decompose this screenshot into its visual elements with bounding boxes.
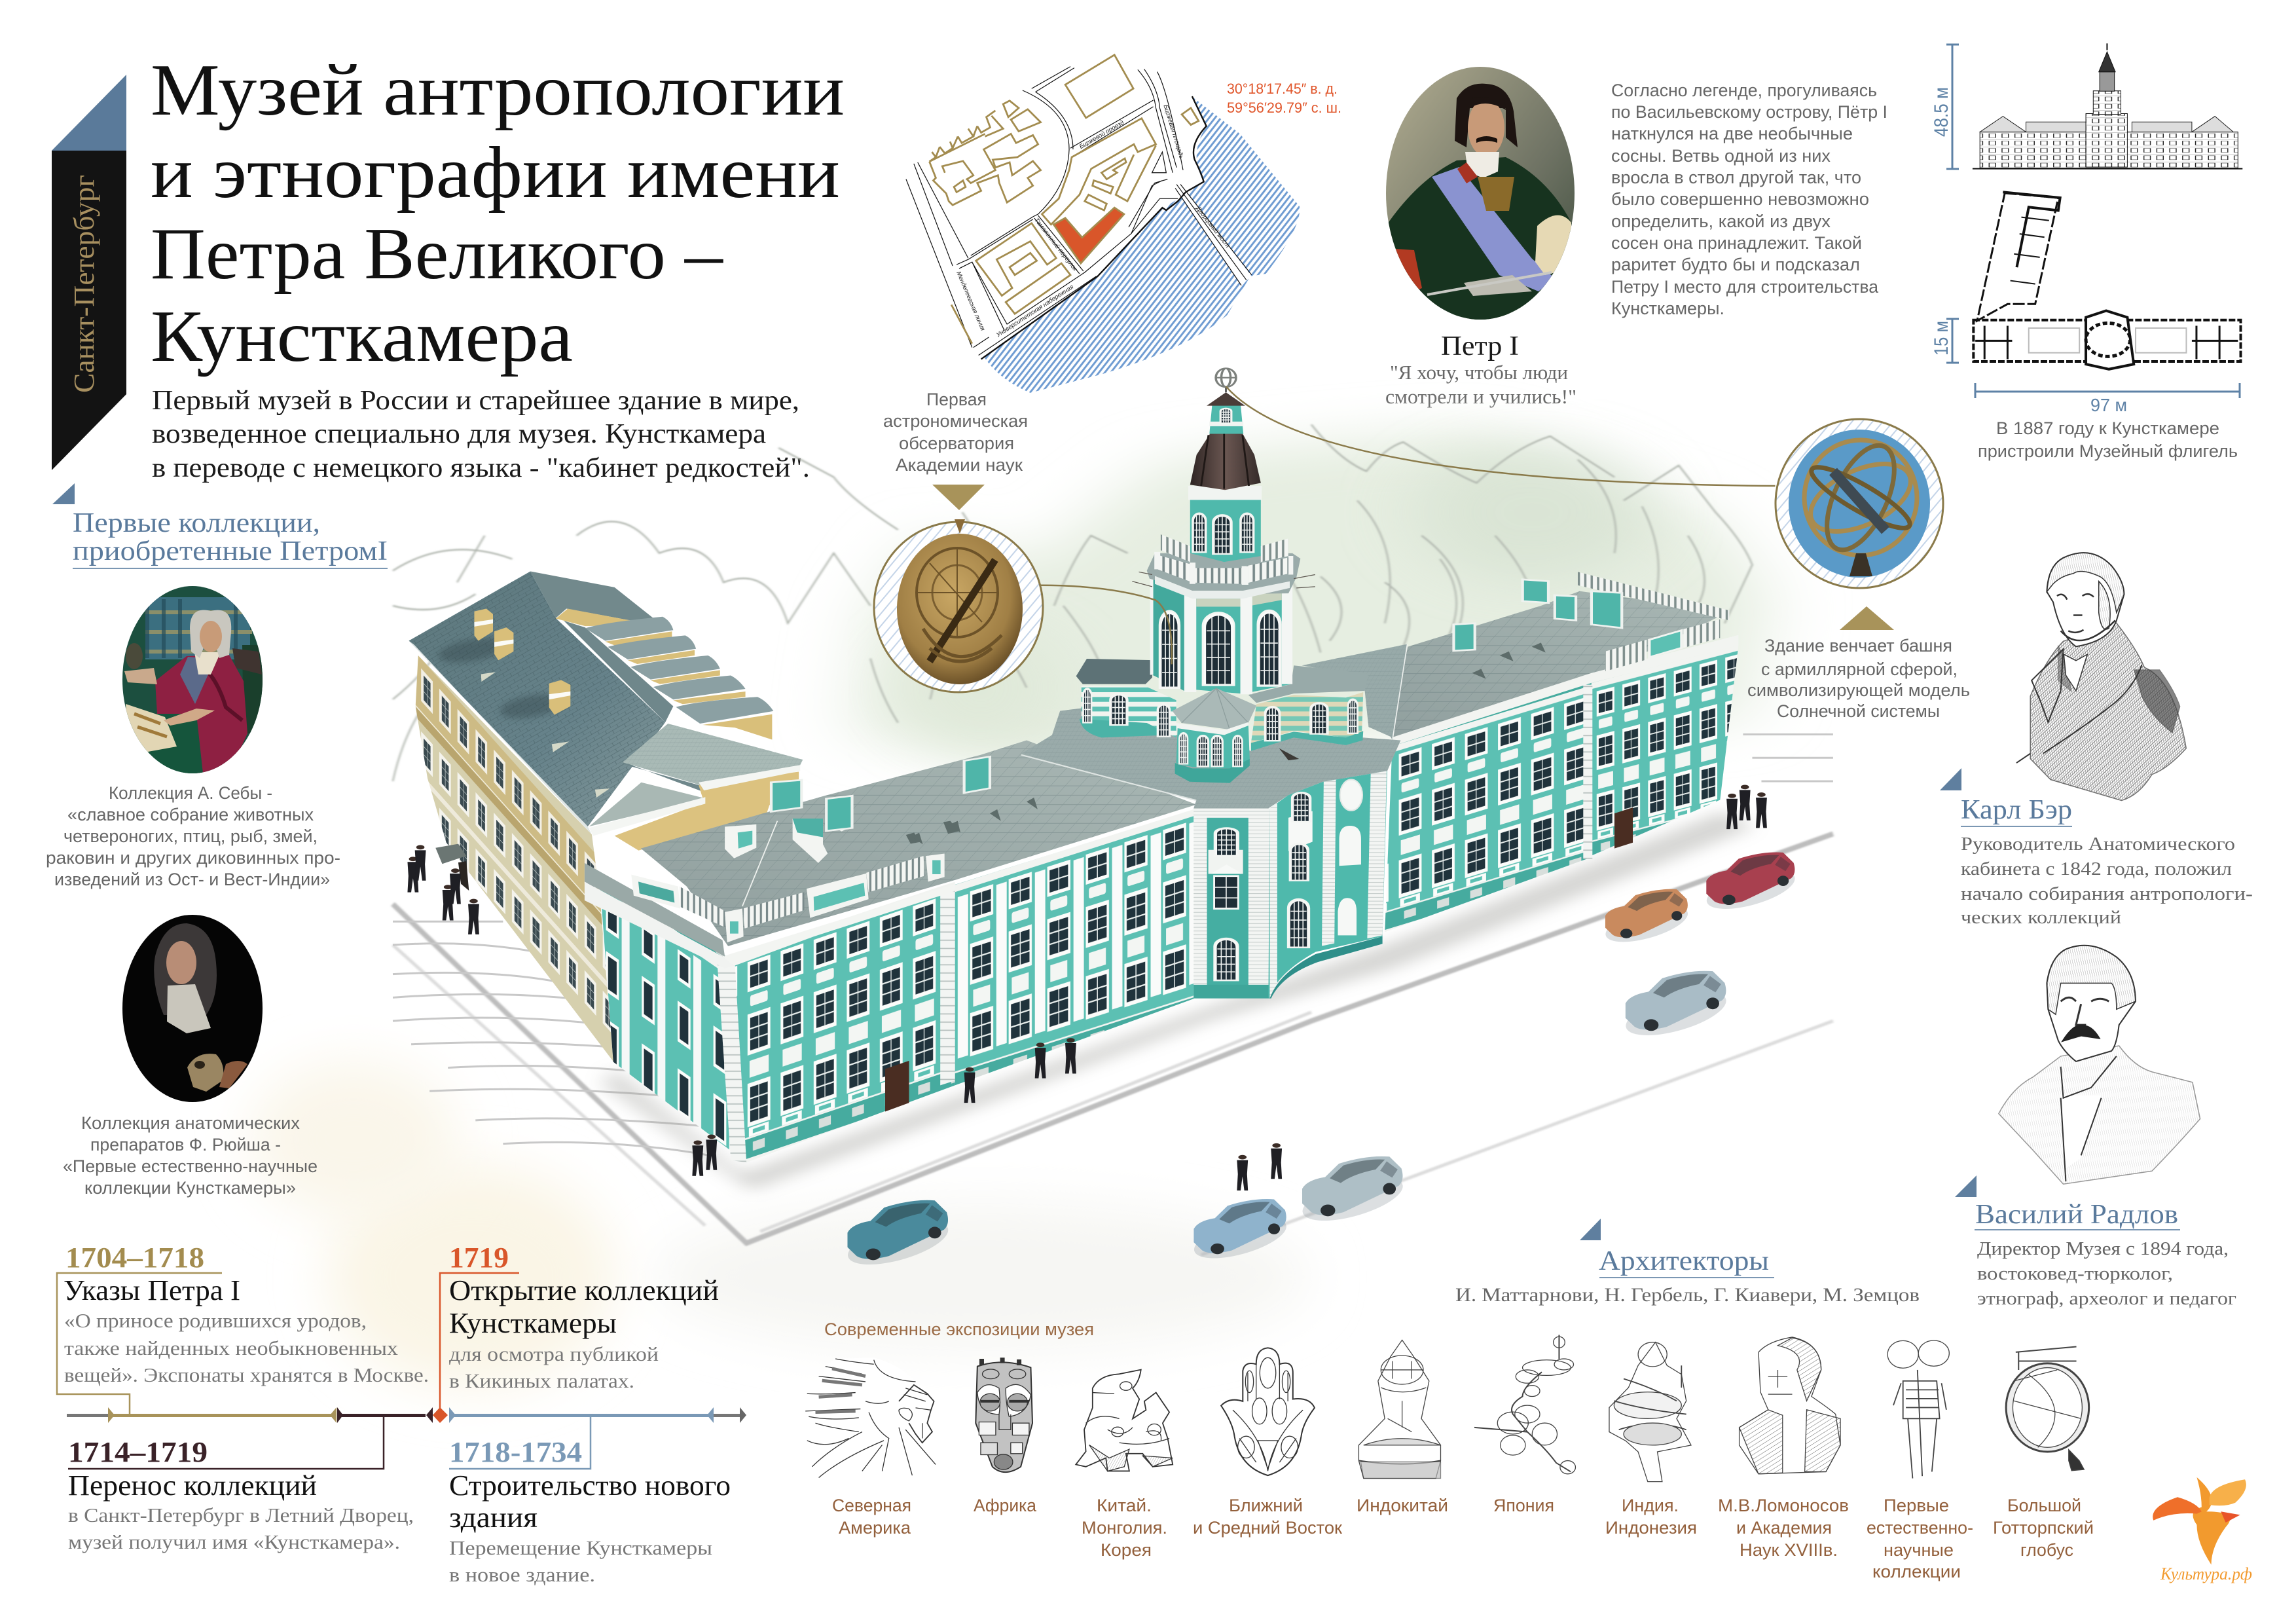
map: Биржевой проезд (1078, 119, 1125, 151)
timeline: 1719: для осмотра публикой (449, 1342, 659, 1365)
exposition labels: Корея (1101, 1540, 1152, 1560)
caption: observatory (883, 390, 1028, 475)
main facade right section (955, 809, 1194, 1085)
timeline: 1714–1719: Перенос коллекций (68, 1469, 317, 1502)
chimneys on front roof rear (771, 756, 990, 831)
heading: architects: И. Маттарнови, Н. Гербель, Г. Киавери, М. Земцов (1455, 1284, 1920, 1306)
legend text: Кунсткамеры. (1611, 299, 1724, 318)
caption: observatory: Первая (926, 390, 987, 409)
pointer down (932, 485, 985, 510)
caption: observatory: Академии наук (896, 455, 1023, 475)
timeline: 1718-1734: 1718-1734 (449, 1436, 582, 1468)
street sketch (393, 735, 1833, 1255)
timeline: 1718-1734: здания (449, 1502, 538, 1534)
left wing (409, 571, 803, 1061)
text: Radlov: Директор Музея с 1894 года, (1977, 1239, 2229, 1259)
cars (837, 853, 1804, 1274)
upper tower (1161, 369, 1288, 562)
front roof details (585, 819, 958, 968)
portrait: Peter I (1386, 65, 1575, 321)
timeline: 1704–1718 (57, 1242, 429, 1415)
timeline: 1719: в Кикиных палатах. (449, 1369, 634, 1392)
dimensions: 48.5 м (1931, 87, 1952, 137)
exposition labels (832, 1496, 2094, 1581)
caption: tower (1747, 636, 1970, 721)
caption: Ruysch collection: препаратов Ф. Рюйша - (90, 1135, 281, 1154)
elevation drawing (1973, 43, 2242, 169)
background washes (249, 1061, 1309, 1388)
icon: Buddha (1358, 1340, 1440, 1479)
exposition labels: и Средний Восток (1193, 1518, 1342, 1538)
caption: Seba collection: четвероногих, птиц, рыб, змей, (64, 826, 318, 846)
timeline: 1719 (440, 1242, 719, 1415)
Peter I name and quote: смотрели и учились!" (1385, 385, 1576, 408)
ribbon: Санкт-Петербург: Санкт-Петербург (68, 175, 100, 393)
caption: Ruysch collection (63, 1113, 318, 1198)
tower balustrade (1154, 552, 1293, 585)
timeline: 1719: Открытие коллекций (449, 1274, 719, 1306)
logo: Культура.рф (2153, 1477, 2252, 1583)
icon: skeleton (1887, 1340, 1949, 1479)
logo: Культура.рф: Культура.рф (2160, 1564, 2252, 1583)
timeline: 1704–1718: «О приносе родившихся уродов, (64, 1309, 367, 1332)
floor plan (1973, 192, 2241, 369)
exposition labels: естественно- (1867, 1518, 1973, 1538)
heading: Radlov: Василий Радлов (1975, 1200, 2178, 1230)
portrait sketch: Baer (2016, 553, 2186, 800)
portrait: Ruysch (122, 915, 263, 1102)
central block (1021, 553, 1408, 999)
timeline: 1704–1718: вещей». Экспонаты хранятся в Москве. (64, 1363, 429, 1386)
timeline: 1718-1734: Строительство нового (449, 1469, 731, 1502)
icon: Lomonosov (1740, 1337, 1840, 1474)
sketch background (393, 424, 1770, 781)
chimneys (474, 609, 610, 798)
heading: architects: Архитекторы (1599, 1246, 1769, 1276)
front roof (641, 740, 1197, 946)
timeline: 1704–1718: Указы Петра I (64, 1274, 240, 1306)
central apron roof (1021, 709, 1400, 809)
left pavilion (1076, 659, 1152, 684)
exposition labels: коллекции (1872, 1562, 1961, 1581)
legend text: вросла в ствол другой так, что (1611, 168, 1861, 187)
timeline: 1714–1719 (68, 1415, 414, 1553)
caption: Seba collection (46, 783, 340, 889)
exposition labels: и Академия (1736, 1518, 1832, 1538)
exposition labels: М.В.Ломоносов (1718, 1496, 1849, 1515)
subtitle: возведенное специально для музея. Кунсткамера (152, 419, 766, 449)
Peter I name and quote (1385, 331, 1576, 408)
map (906, 55, 1300, 393)
exposition labels: глобус (2020, 1540, 2073, 1560)
title (151, 50, 845, 377)
yellow wall (615, 771, 799, 851)
exposition labels: Индокитай (1357, 1496, 1448, 1515)
caption: Seba collection: изведений из Ост- и Вест-Индии» (54, 870, 330, 889)
caption: Ruysch collection: Коллекция анатомических (81, 1113, 300, 1133)
subtitle: Первый музей в России и старейшее здание в мире, (152, 386, 799, 416)
exposition labels: Готторпский (1993, 1518, 2094, 1538)
heading: first collections: приобретенные ПетромI (73, 536, 388, 566)
exposition labels: Африка (974, 1496, 1037, 1515)
subtitle (152, 386, 810, 483)
exposition icons: first row part (805, 1348, 1315, 1477)
portrait sketch: Radlov (1999, 946, 2200, 1184)
central pavilion (1173, 688, 1256, 729)
right facade (1385, 646, 1738, 932)
pointer up (1840, 606, 1894, 630)
title: Музей антропологии (151, 50, 845, 131)
exposition labels: Ближний (1229, 1496, 1303, 1515)
timeline: 1719: Кунсткамеры (449, 1307, 617, 1339)
heading: first collections: Первые коллекции, (73, 508, 320, 538)
legend text: по Васильевскому острову, Пётр I (1611, 102, 1887, 122)
timeline: 1714–1719: в Санкт-Петербург в Летний Дворец, (68, 1504, 414, 1526)
caption: tower: Солнечной системы (1777, 701, 1940, 721)
armillary sphere callout (1776, 419, 1943, 588)
icon: globe (2006, 1346, 2089, 1471)
legend text: раритет будто бы и подсказал (1611, 255, 1860, 274)
dimensions: 15 м (1931, 321, 1952, 356)
heading: expositions: Современные экспозиции музея (824, 1320, 1094, 1339)
text: Karl Baer: Руководитель Анатомического (1961, 834, 2235, 855)
map coordinates: 59°56′29.79″ с. ш. (1227, 100, 1341, 116)
caption: Ruysch collection: «Первые естественно-научные (63, 1156, 318, 1176)
map coordinates: 30°18′17.45″ в. д. (1227, 81, 1338, 97)
title: Петра Великого – (151, 213, 723, 295)
astrolabe callout (874, 519, 1043, 692)
caption: tower: символизирующей модель (1747, 680, 1970, 700)
legend text (1611, 81, 1887, 318)
heading: Karl Baer: Карл Бэр (1961, 795, 2072, 825)
timeline: 1714–1719: 1714–1719 (68, 1436, 208, 1468)
heading: Radlov (1955, 1175, 2180, 1230)
icon: Hamsa (1221, 1348, 1315, 1475)
right pavilion (1248, 665, 1368, 703)
legend text: Петру I место для строительства (1611, 277, 1879, 297)
map: Университетская набережная (994, 284, 1075, 339)
exposition labels: Япония (1493, 1496, 1554, 1515)
text: Karl Baer: начало собирания антропологи- (1961, 884, 2253, 904)
right roof (912, 572, 1738, 844)
dimensions (1931, 45, 2240, 415)
heading: Karl Baer (1940, 768, 2072, 827)
caption: Seba collection: раковин и других диковинных про- (46, 848, 340, 868)
icon: North America (805, 1357, 936, 1477)
caption: observatory: астрономическая (883, 411, 1028, 431)
left wing facade (416, 655, 613, 1061)
legend text: сосен она принадлежит. Такой (1611, 233, 1862, 253)
icon: Africa mask (975, 1357, 1032, 1472)
central risalit flat (1194, 809, 1269, 999)
building illustration (393, 369, 1833, 1274)
caption: Ruysch collection: коллекции Кунсткамеры» (84, 1178, 296, 1198)
caption: museum wing: пристроили Музейный флигель (1978, 441, 2238, 461)
title: Кунсткамера (151, 296, 573, 377)
exposition icons: second part (1358, 1335, 2089, 1482)
exposition labels: Большой (2007, 1496, 2081, 1515)
map: Биржевая площадь (1162, 104, 1185, 160)
timeline: 1704–1718: 1704–1718 (65, 1242, 204, 1274)
portrait: Seba (122, 586, 263, 773)
exposition labels: Китай. (1097, 1496, 1152, 1515)
icon: Ganesh (1609, 1342, 1691, 1482)
timeline: 1718-1734 (449, 1415, 731, 1586)
heading: first collections (52, 483, 388, 569)
caption: tower: Здание венчает башня (1764, 636, 1952, 655)
text: Radlov (1977, 1239, 2236, 1309)
text: Karl Baer: ческих коллекций (1961, 908, 2121, 928)
icon: Japan flower (1474, 1335, 1575, 1474)
title: и этнографии имени (151, 132, 840, 213)
timeline: 1714–1719: музей получил имя «Кунсткамера». (68, 1530, 400, 1553)
legend text: было совершенно невозможно (1611, 189, 1869, 209)
map: Таможенный переулок (1032, 217, 1079, 273)
Peter I name and quote: "Я хочу, чтобы люди (1390, 361, 1568, 384)
exposition labels: Первые (1884, 1496, 1949, 1515)
Peter I name and quote: Петр I (1441, 331, 1519, 361)
ribbon: Санкт-Петербург (52, 75, 126, 470)
lighter lower roofs (623, 724, 803, 785)
map coordinates (1227, 81, 1341, 116)
timeline: 1704–1718: также найденных необыкновенных (64, 1337, 399, 1359)
left wing main roof (409, 571, 665, 826)
upper roof slope (530, 571, 653, 621)
short facade (600, 877, 746, 1162)
exposition labels: Монголия. (1082, 1518, 1167, 1538)
text: Karl Baer (1961, 834, 2253, 928)
legend text: определить, какой из двух (1611, 212, 1831, 231)
people (407, 784, 1767, 1190)
caption: tower: с армиллярной сферой, (1761, 659, 1958, 679)
heading: architects (1455, 1219, 1920, 1306)
caption: museum wing (1978, 418, 2238, 461)
entrance canopy (435, 844, 466, 864)
legend text: сосны. Ветвь одной из них (1611, 146, 1831, 166)
exposition labels: Америка (839, 1518, 911, 1538)
main facade left section (729, 882, 955, 1162)
octagon (1152, 579, 1184, 691)
exposition labels: научные (1884, 1540, 1954, 1560)
map: Менделеевская линия (955, 270, 987, 332)
exposition labels: Наук XVIIIв. (1740, 1540, 1838, 1560)
timeline: 1719: 1719 (449, 1242, 509, 1274)
exposition labels: Индия. (1622, 1496, 1679, 1515)
legend text: наткнулся на две необычные (1611, 124, 1853, 143)
rusticated strips (717, 885, 955, 1162)
subtitle: в переводе с немецкого языка - "кабинет редкостей". (152, 453, 810, 483)
platform roof (1147, 553, 1300, 594)
building shadow (604, 811, 1752, 1190)
caption: observatory: обсерватория (899, 434, 1014, 453)
timeline axis (67, 1407, 746, 1423)
text: Radlov: этнограф, археолог и педагог (1977, 1289, 2236, 1309)
exposition labels: Индонезия (1605, 1518, 1697, 1538)
stepped dormers (585, 617, 773, 739)
text: Karl Baer: кабинета с 1842 года, положил (1961, 859, 2232, 879)
central risalit curved (1268, 771, 1387, 999)
map: Дворцовый мост (1194, 205, 1231, 249)
dimensions: 97 м (2090, 395, 2127, 415)
caption: Seba collection: Коллекция А. Себы - (109, 783, 272, 803)
icon: China lion (1076, 1370, 1173, 1471)
timeline: 1718-1734: Перемещение Кунсткамеры (449, 1536, 712, 1559)
timeline: 1718-1734: в новое здание. (449, 1563, 595, 1586)
caption: museum wing: В 1887 году к Кунсткамере (1996, 418, 2219, 438)
text: Radlov: востоковед-тюрколог, (1977, 1264, 2173, 1284)
legend text: Согласно легенде, прогуливаясь (1611, 81, 1877, 100)
caption: Seba collection: «славное собрание животных (67, 805, 314, 824)
callout lines (1040, 386, 1776, 664)
exposition labels: Северная (832, 1496, 911, 1515)
